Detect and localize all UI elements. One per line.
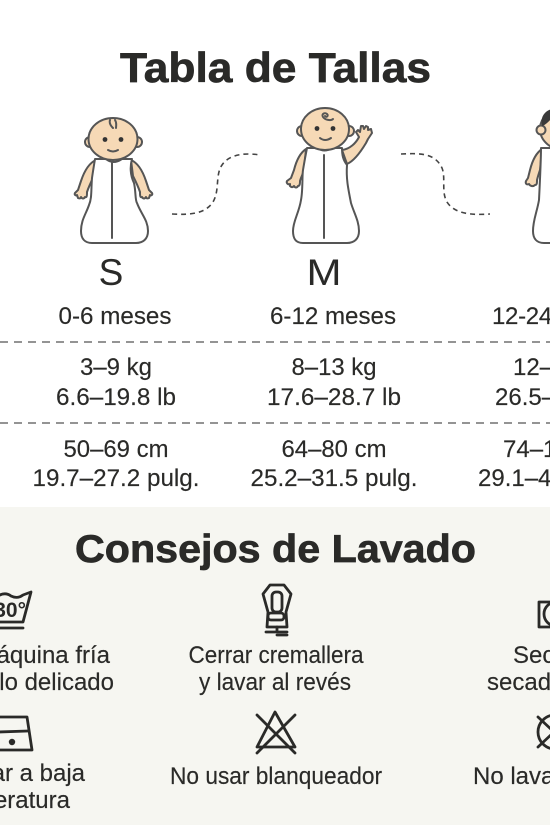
- text: tumble dry: [487, 642, 550, 696]
- row: age: 6-12 meses: [270, 303, 396, 330]
- size letters: S: [99, 252, 123, 293]
- icon: iron low heat: [0, 717, 32, 750]
- title: Tabla de Tallas: Tabla de Tallas: [120, 44, 431, 91]
- row: weight: 3–9 kg: [80, 354, 152, 381]
- icon: wash tub 30 degrees: [0, 592, 31, 628]
- divider: [0, 341, 550, 343]
- illustration: baby size L (cropped): [526, 108, 550, 243]
- row: age: 0-6 meses: [58, 303, 172, 330]
- row: height: 64–80 cm: [282, 436, 386, 463]
- icon: zipper: [263, 585, 291, 635]
- row: height: [32, 436, 550, 492]
- icon: do not bleach: [257, 712, 295, 753]
- icon: do not dry clean (cropped): [538, 715, 550, 749]
- row: height: 25.2–31.5 pulg.: [250, 465, 418, 492]
- illustration: baby size S: [75, 118, 152, 243]
- row: weight: 17.6–28.7 lb: [267, 384, 401, 411]
- text: close zipper: Cerrar cremallera: [188, 642, 364, 669]
- heading: Consejos de Lavado: Consejos de Lavado: [75, 528, 476, 571]
- row: weight: [56, 354, 550, 411]
- row: height: 19.7–27.2 pulg.: [32, 465, 200, 492]
- connector: dashed line M to L: [401, 154, 490, 214]
- divider: [0, 422, 550, 424]
- text: close zipper: [188, 642, 364, 696]
- row: weight: 6.6–19.8 lb: [56, 384, 176, 411]
- text: do not bleach: No usar blanqueador: [170, 763, 382, 790]
- text: iron low temperature: [0, 760, 86, 814]
- illustration: baby size M: [287, 108, 372, 243]
- size letters: M: [306, 252, 342, 293]
- text: machine wash: [0, 642, 114, 696]
- size letters: [99, 252, 342, 293]
- connector: dashed line S to M: [172, 154, 260, 214]
- text: close zipper: y lavar al revés: [199, 669, 351, 696]
- icon: tumble dry (cropped): [539, 602, 550, 627]
- row: weight: 8–13 kg: [292, 354, 376, 381]
- row: age: [58, 303, 550, 330]
- row: height: 50–69 cm: [64, 436, 168, 463]
